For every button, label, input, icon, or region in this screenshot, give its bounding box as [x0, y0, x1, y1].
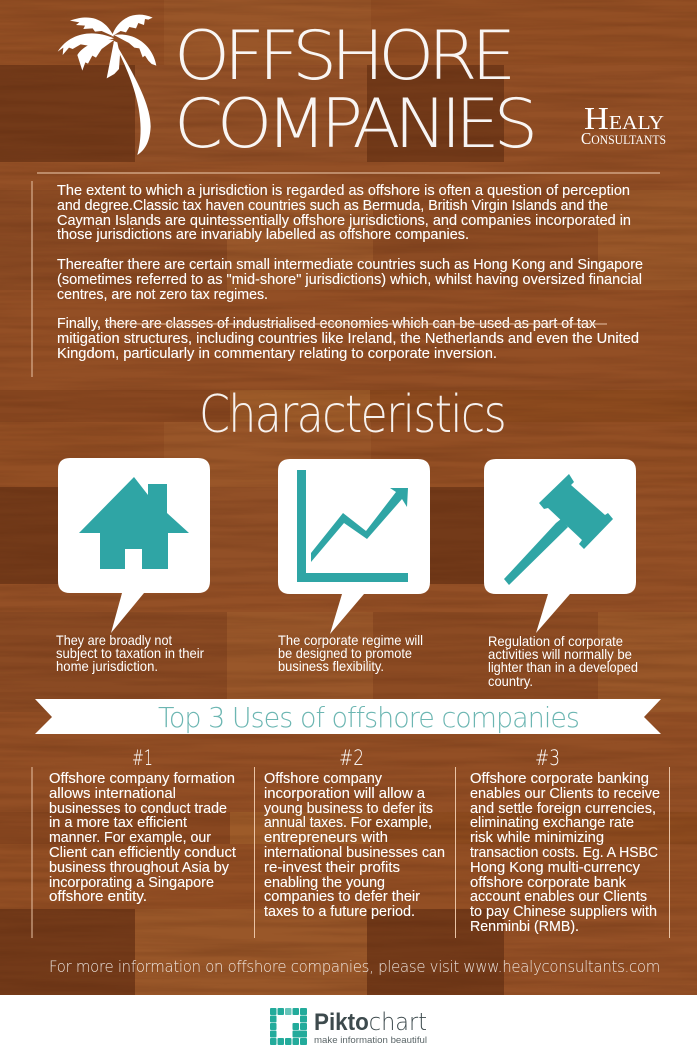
- intro text block: those jurisdictions are invariably labelled as offshore companies.: [57, 227, 469, 243]
- caption 1: [56, 632, 204, 674]
- caption 3: lighter than in a developed: [488, 659, 638, 675]
- banner: top 3 uses: Top 3 Uses of offshore companies: [158, 701, 579, 734]
- column: use 3: #3: [535, 746, 560, 770]
- column: use 3: Offshore corporate banking: [470, 771, 649, 787]
- column: use 3: and settle foreign currencies,: [470, 801, 656, 817]
- intro text block: Finally, there are classes of industrialised economies which can be used as part of tax: [57, 316, 597, 332]
- intro text block: The extent to which a jurisdiction is regarded as offshore is often a question of perception: [57, 183, 630, 199]
- column: use 2: #2: [339, 746, 364, 770]
- column: use 3: transaction costs. Eg. A HSBC: [470, 845, 658, 861]
- footer link text: For more information on offshore companies, please visit www.healyconsultants.com: [49, 957, 660, 976]
- heading: Characteristics: Characteristics: [199, 385, 505, 445]
- title: COMPANIES: [174, 85, 533, 164]
- column: use 2: companies to defer their: [264, 889, 420, 905]
- caption 2: [278, 632, 423, 674]
- panel: chart characteristic: [278, 459, 430, 674]
- intro text block: Cayman Islands are quintessentially offshore jurisdictions, and companies incorporated in: [57, 213, 631, 229]
- caption 2: The corporate regime will: [278, 632, 423, 648]
- column: use 1: manner. For example, our: [49, 830, 211, 846]
- icon: palm tree: [58, 15, 156, 155]
- column: use 1: incorporating a Singapore: [49, 875, 214, 891]
- speech bubble 3: [484, 459, 636, 633]
- column: use 1: offshore entity.: [49, 889, 147, 905]
- caption 3: Regulation of corporate: [488, 633, 623, 649]
- title: [174, 17, 533, 164]
- column: use 1: businesses to conduct trade: [49, 801, 227, 817]
- column: use 2: young business to defer its: [264, 801, 433, 817]
- column: use 2: incorporation will allow a: [264, 786, 426, 802]
- column: use 3: eliminating exchange rate: [470, 815, 634, 831]
- column: use 3: [455, 746, 670, 938]
- panel: gavel characteristic: [484, 459, 638, 689]
- intro text block: mitigation structures, including countries like Ireland, the Netherlands and even the United: [57, 331, 639, 347]
- column: use 2: international businesses can: [264, 845, 445, 861]
- column: use 3: account enables our Clients: [470, 889, 647, 905]
- icon: gavel: [504, 474, 613, 585]
- caption 1: home jurisdiction.: [56, 658, 158, 674]
- column: use 3: offshore corporate bank: [470, 875, 627, 891]
- column: use 2: Offshore company: [264, 771, 383, 787]
- intro text block: and degree.Classic tax haven countries such as Bermuda, British Virgin Islands and the: [57, 198, 608, 214]
- caption 1: subject to taxation in their: [56, 645, 204, 661]
- column: use 1: allows international: [49, 786, 176, 802]
- column: use 1: Offshore company formation: [49, 771, 235, 787]
- banner: top 3 uses: [35, 699, 661, 734]
- logo: Piktochart: [270, 1008, 427, 1046]
- title: OFFSHORE: [174, 17, 510, 96]
- caption 2: business flexibility.: [278, 658, 384, 674]
- column: use 2: enabling the young: [264, 875, 385, 891]
- icon: growth chart: [297, 470, 408, 582]
- logo mark: [270, 1008, 307, 1045]
- caption 2: be designed to promote: [278, 645, 412, 661]
- column: use 3: to pay Chinese suppliers with: [470, 904, 657, 920]
- column: use 1: business throughout Asia by: [49, 860, 230, 876]
- logo: Healy Consultants: HEALY: [584, 100, 664, 136]
- speech bubble 2: [278, 459, 430, 634]
- intro text block: Kingdom, particularly in commentary relating to corporate inversion.: [57, 346, 497, 362]
- column: use 3: Hong Kong multi-currency: [470, 860, 641, 876]
- caption 3: activities will normally be: [488, 646, 632, 662]
- caption 1: They are broadly not: [56, 632, 172, 648]
- logo: Healy Consultants: [581, 100, 666, 148]
- column: use 2: [254, 746, 445, 938]
- intro text block: (sometimes referred to as "mid-shore" jurisdictions) which, whilst having oversized financial: [57, 272, 642, 288]
- column: use 1: [32, 746, 236, 938]
- column: use 1: #1: [132, 746, 153, 770]
- intro text block: centres, are not zero tax regimes.: [57, 287, 268, 303]
- icon: house: [79, 477, 189, 569]
- intro text block: [32, 172, 660, 377]
- speech bubble 1: [58, 458, 210, 633]
- column: use 2: annual taxes. For example,: [264, 815, 432, 831]
- column: use 2: re-invest their profits: [264, 860, 400, 876]
- column: use 3: enables our Clients to receive: [470, 786, 660, 802]
- column: use 3: risk while minimizing: [470, 830, 604, 846]
- column: use 1: Client can efficiently conduct: [49, 845, 236, 861]
- column: use 2: entrepreneurs with: [264, 830, 388, 846]
- caption 3: country.: [488, 673, 533, 689]
- logo tagline: make information beautiful: [314, 1035, 427, 1046]
- logo: Healy Consultants: CONSULTANTS: [581, 129, 666, 148]
- column: use 3: Renminbi (RMB).: [470, 919, 579, 935]
- caption 3: [488, 633, 638, 689]
- logo wordmark: Piktochart: [314, 1008, 427, 1036]
- column: use 2: taxes to a future period.: [264, 904, 415, 920]
- panel: house characteristic: [56, 458, 210, 674]
- intro text block: Thereafter there are certain small intermediate countries such as Hong Kong and Singapore: [57, 257, 643, 273]
- footer: white strip: [0, 995, 697, 1059]
- column: use 1: in a more tax efficient: [49, 815, 187, 831]
